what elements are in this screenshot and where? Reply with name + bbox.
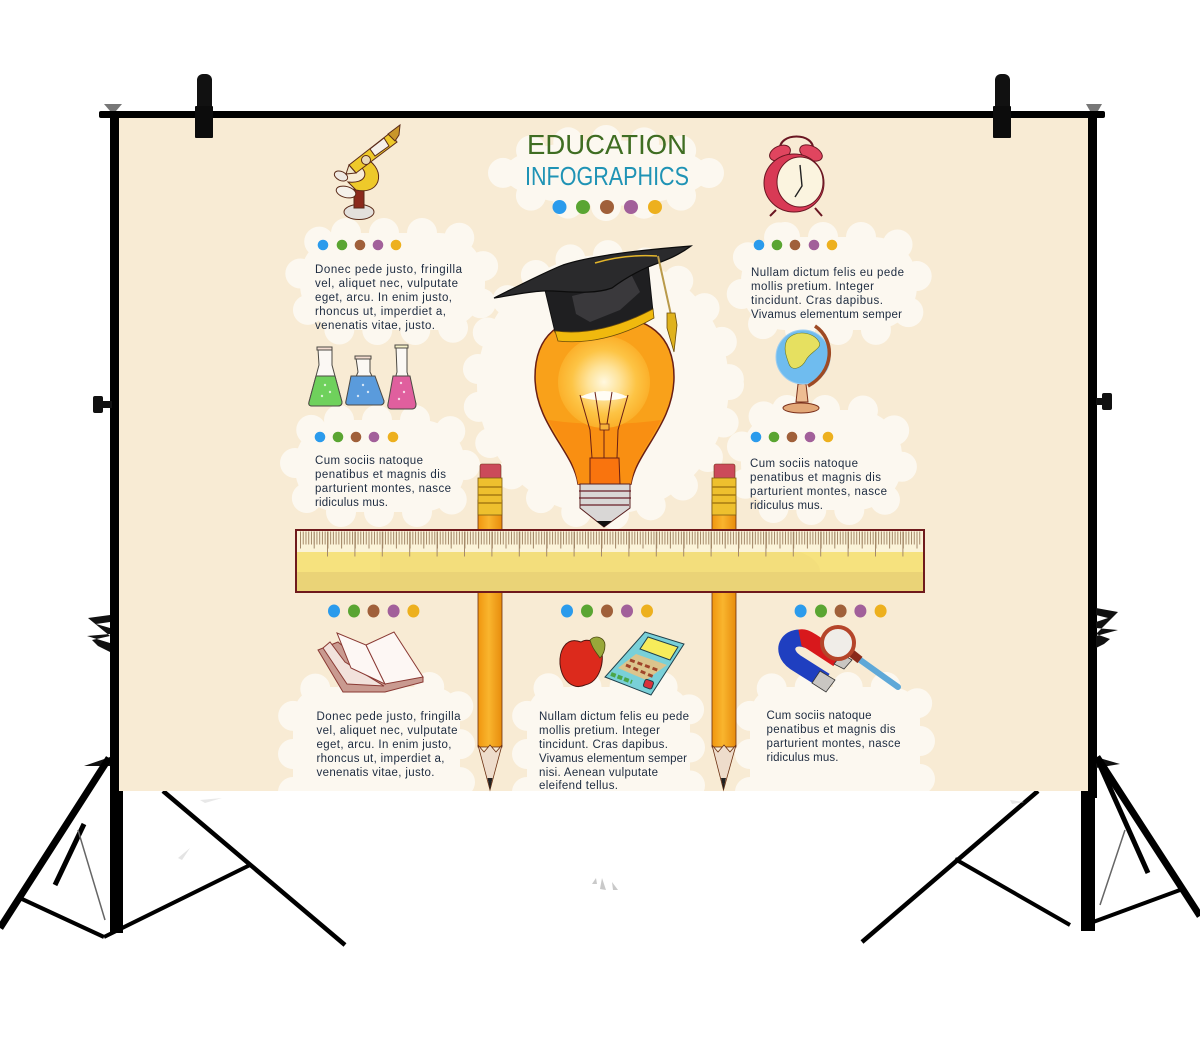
text block: middle right: ridiculus mus. (750, 500, 823, 512)
text block: bottom centre: nisi. Aenean vulputate (539, 767, 658, 779)
text block: middle left (315, 432, 451, 509)
text block: bottom right (766, 710, 900, 764)
text block: bottom centre: eleifend tellus. (539, 780, 618, 792)
icon: open book (318, 632, 423, 692)
text block: bottom right: ridiculus mus. (766, 752, 838, 764)
dots: middle right (751, 432, 833, 442)
icon: magnifying glass (822, 627, 898, 687)
pencil: left (478, 464, 502, 790)
dots: below ruler right (795, 604, 887, 618)
dots: top right (754, 240, 837, 250)
text block: bottom left: venenatis vitae, justo. (316, 767, 434, 779)
text block: top right: mollis pretium. Integer (751, 281, 874, 293)
text block: bottom left: vel, aliquet nec, vulputate (316, 725, 458, 737)
light bulb (535, 316, 674, 527)
text block: bottom left (316, 711, 461, 779)
dots: middle left (315, 432, 398, 442)
text block: top left (315, 240, 463, 332)
dots: top left (318, 240, 401, 250)
backdrop stand: right (862, 118, 1200, 942)
title: INFOGRAPHICS (525, 161, 689, 191)
text block: bottom left: rhoncus ut, imperdiet a, (316, 753, 444, 765)
text block: top left: Donec pede justo, fringilla (315, 264, 463, 276)
text block: bottom centre: mollis pretium. Integer (539, 725, 660, 737)
icon: apple (560, 637, 605, 686)
icon: globe (776, 326, 830, 413)
text block: bottom centre: Vivamus elementum semper (539, 753, 687, 765)
text block: middle right: penatibus et magnis dis (750, 472, 881, 484)
text block: middle left: parturient montes, nasce (315, 483, 451, 495)
top crossbar and clips (99, 74, 1105, 138)
text block: top right: Vivamus elementum semper (751, 309, 902, 321)
graduation cap (494, 246, 691, 352)
title dots (552, 200, 662, 214)
text block: bottom left: eget, arcu. In enim justo, (316, 739, 452, 751)
text block: bottom right: penatibus et magnis dis (766, 724, 896, 736)
icon: alarm clock (764, 136, 825, 216)
text block: middle left: penatibus et magnis dis (315, 469, 446, 481)
dots: below ruler centre (561, 604, 653, 618)
text block: bottom centre: Nullam dictum felis eu pede (539, 711, 689, 723)
text block: bottom left: Donec pede justo, fringilla (316, 711, 461, 723)
title (525, 129, 689, 191)
cloud backgrounds (293, 140, 920, 830)
text block: middle right: Cum sociis natoque (750, 458, 858, 470)
icon: flasks (309, 345, 416, 409)
ruler (296, 530, 924, 592)
backdrop panel (119, 118, 1088, 791)
text block: top left: vel, aliquet nec, vulputate (315, 278, 458, 290)
text block: bottom right: Cum sociis natoque (766, 710, 872, 722)
text block: middle right: parturient montes, nasce (750, 486, 887, 498)
backdrop stand: left (0, 118, 345, 945)
title: EDUCATION (527, 129, 687, 160)
text block: top right (751, 240, 904, 321)
text block: top left: venenatis vitae, justo. (315, 320, 435, 332)
text block: bottom centre (539, 711, 689, 792)
icon: magnet (787, 638, 852, 692)
text block: middle left: ridiculus mus. (315, 497, 388, 509)
text block: top right: Nullam dictum felis eu pede (751, 267, 904, 279)
pencil: right (712, 464, 736, 790)
icon: microscope (333, 125, 400, 220)
text block: middle right (750, 432, 887, 512)
text block: top right: tincidunt. Cras dapibus. (751, 295, 883, 307)
text block: top left: eget, arcu. In enim justo, (315, 292, 452, 304)
icon: calculator (605, 632, 684, 695)
text block: bottom right: parturient montes, nasce (766, 738, 900, 750)
dots: below ruler left (328, 604, 419, 618)
text block: top left: rhoncus ut, imperdiet a, (315, 306, 446, 318)
text block: middle left: Cum sociis natoque (315, 455, 423, 467)
faint floor marks (178, 798, 1024, 890)
text block: bottom centre: tincidunt. Cras dapibus. (539, 739, 668, 751)
